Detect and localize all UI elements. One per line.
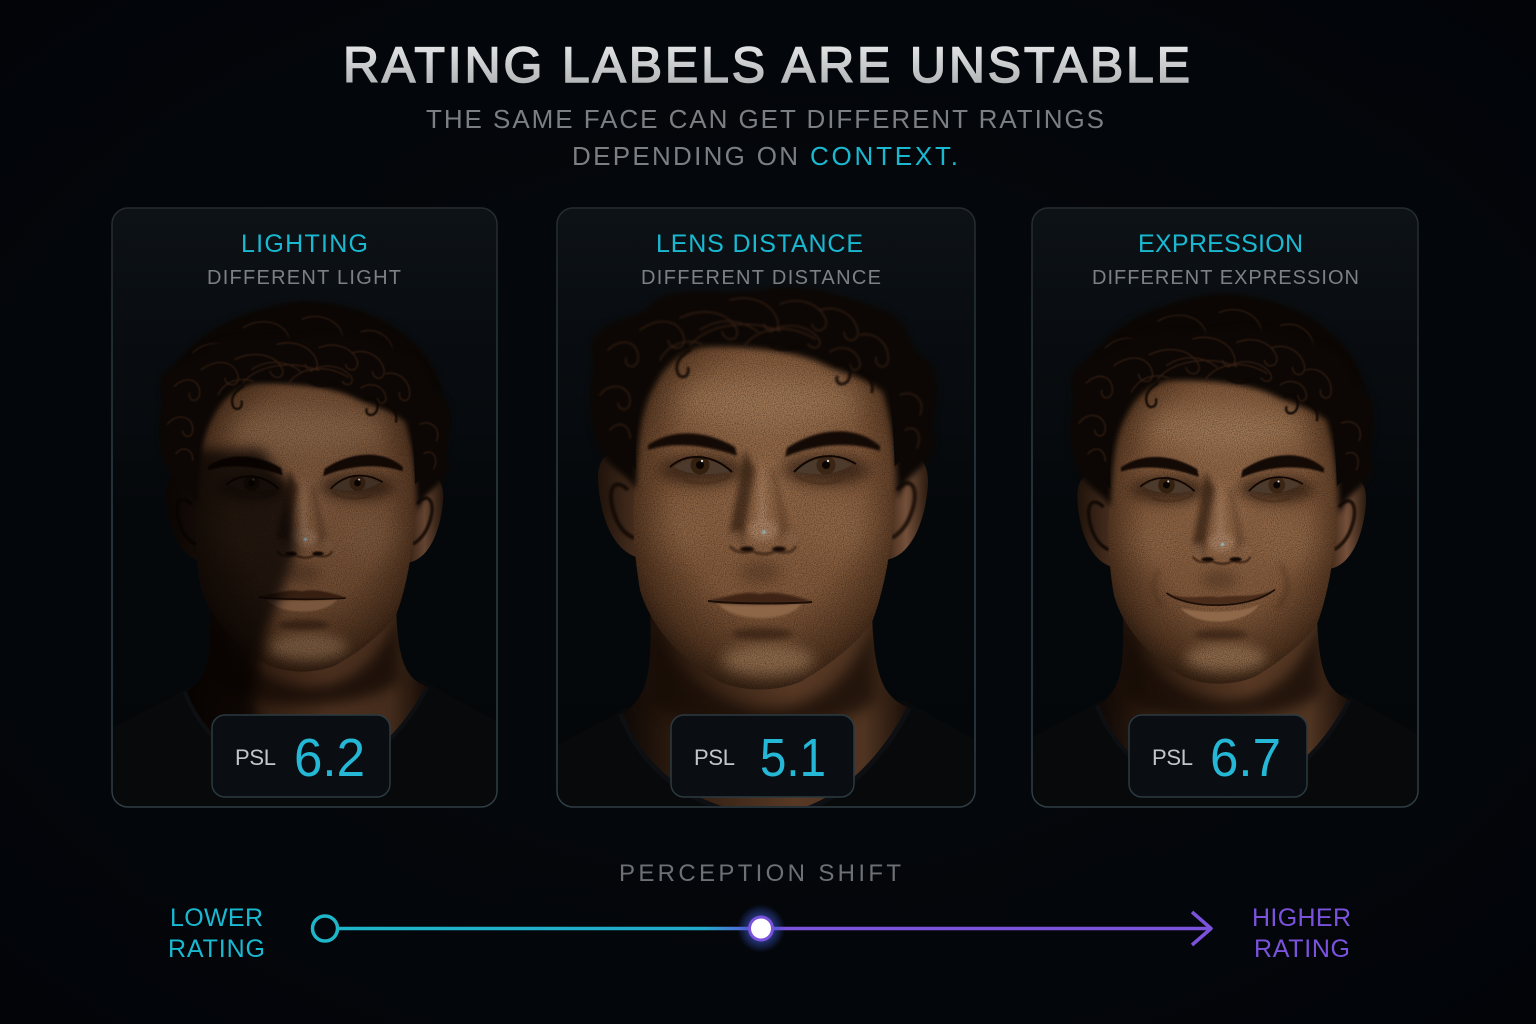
- rating badge: 6.2: [294, 728, 365, 788]
- scale start marker: [312, 916, 338, 941]
- scale marker: [737, 904, 785, 952]
- perception scale: [312, 904, 1211, 952]
- rating badge: 5.1: [760, 728, 826, 788]
- subtitle: THE SAME FACE CAN GET DIFFERENT RATINGS: [426, 104, 1104, 134]
- card caption: DIFFERENT EXPRESSION: [1092, 267, 1359, 289]
- subtitle: DEPENDING ON: [572, 141, 798, 171]
- rating badge: PSL: [694, 745, 735, 770]
- rating badge: 6.7: [1210, 728, 1281, 788]
- card heading: LIGHTING: [241, 230, 368, 258]
- subtitle: CONTEXT.: [810, 141, 958, 171]
- rating badge: [212, 715, 390, 797]
- card heading: LENS DISTANCE: [656, 230, 863, 258]
- portrait: close lens face: [592, 287, 936, 806]
- rating badge: PSL: [1152, 745, 1193, 770]
- label: higher rating: [1252, 904, 1351, 963]
- panel: expression: [1031, 207, 1419, 808]
- scale heading: PERCEPTION SHIFT: [619, 860, 901, 887]
- card caption: DIFFERENT LIGHT: [207, 267, 401, 289]
- title: RATING LABELS ARE UNSTABLE: [343, 37, 1190, 93]
- card caption: DIFFERENT DISTANCE: [641, 267, 881, 289]
- label: lower rating: LOWER: [170, 904, 263, 932]
- panel: lens distance: [556, 207, 976, 808]
- rating badge: PSL: [235, 745, 276, 770]
- portrait: shadowed face: [84, 301, 529, 815]
- portrait: smiling face: [992, 293, 1455, 835]
- label: higher rating: HIGHER: [1252, 904, 1351, 932]
- rating badge: [1129, 715, 1307, 797]
- panel: lighting: [111, 207, 498, 808]
- label: lower rating: RATING: [168, 935, 265, 963]
- rating badge: [671, 715, 854, 797]
- subtitle: [426, 104, 1104, 171]
- arrow head: [1192, 912, 1211, 945]
- card heading: EXPRESSION: [1138, 230, 1303, 258]
- label: higher rating: RATING: [1254, 935, 1350, 963]
- label: lower rating: [168, 904, 265, 963]
